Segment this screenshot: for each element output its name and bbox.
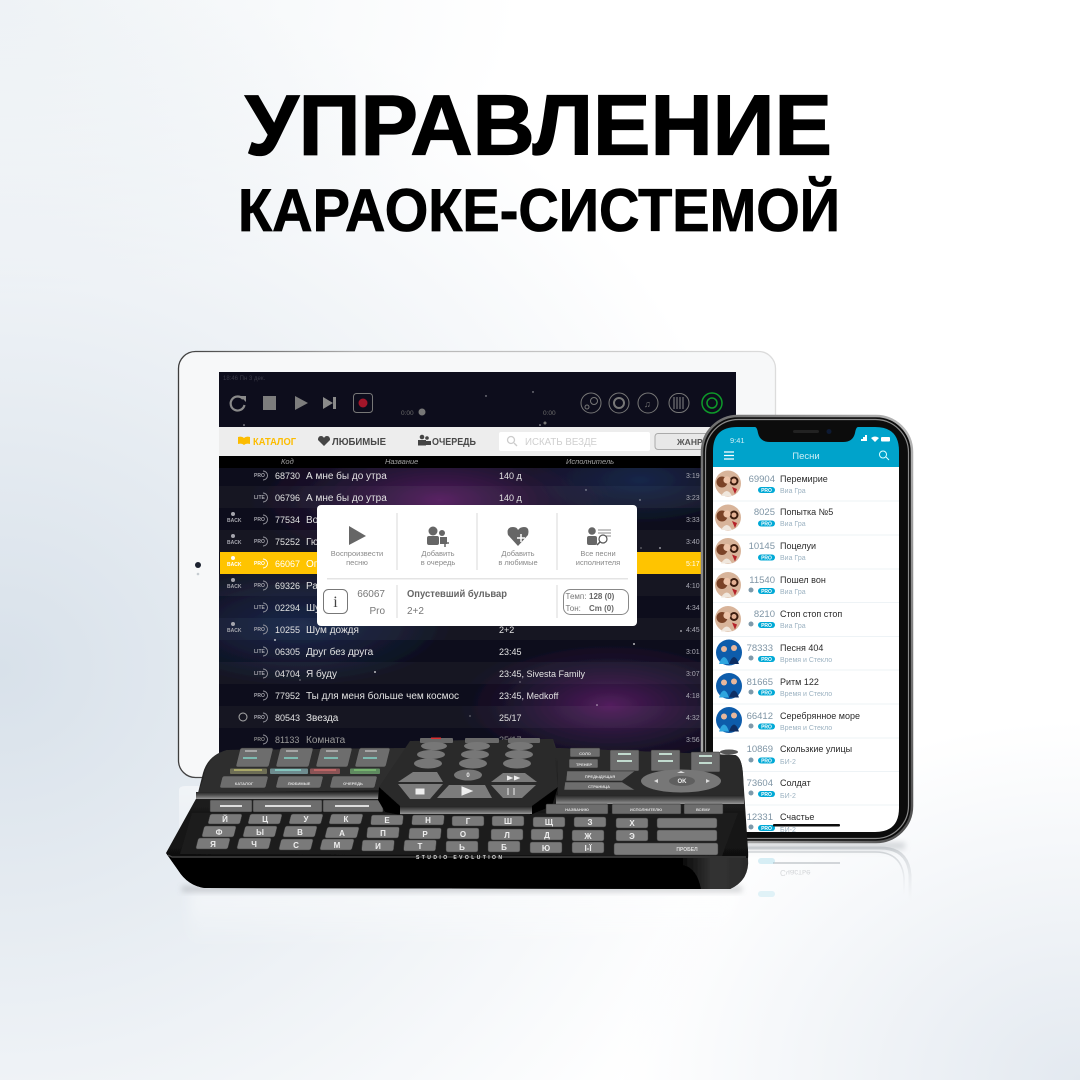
phone song list: Виа Гра (780, 488, 806, 495)
song rows: 4:45 (686, 627, 700, 634)
song rows: 68730 (275, 471, 300, 481)
phone shadow and reflection (745, 843, 910, 900)
phone song list: Время и Стекло (780, 725, 832, 732)
tempo box: Cm (0) (589, 604, 614, 613)
song rows: 4:10 (686, 583, 700, 590)
phone song list: PRO (761, 488, 772, 494)
menu strip: ЖАНР (676, 437, 703, 447)
song rows: PRO (254, 561, 265, 567)
action labels: песню (346, 558, 368, 567)
cyrillic keyboard (196, 814, 718, 855)
cyrillic keyboard: Н (425, 816, 431, 825)
app header (713, 427, 899, 467)
song rows: 75252 (275, 537, 300, 547)
song rows: 77952 (275, 691, 300, 701)
highlighted row (220, 552, 736, 574)
song rows: А мне бы до утра (306, 492, 387, 504)
phone song list: Время и Стекло (780, 657, 832, 664)
pro badges (758, 487, 775, 831)
song rows: PRO (254, 627, 265, 633)
table header (219, 456, 736, 468)
phone song list: 10869 (747, 744, 773, 755)
icon: add to queue (427, 526, 449, 547)
icon: artist songs (587, 527, 611, 545)
cyrillic keyboard: А (339, 829, 345, 838)
table header: Исполнитель (566, 457, 614, 466)
song rows: 23:45, Medkoff (499, 691, 559, 701)
cyrillic keyboard: Щ (545, 818, 554, 827)
phone song list: PRO (761, 657, 772, 663)
song rows: BACK (227, 628, 242, 634)
right panel keys: ИСПОЛНИТЕЛЮ (630, 807, 662, 812)
song rows: BACK (227, 540, 242, 546)
phone song list: 8025 (754, 507, 775, 518)
remote reflection (190, 892, 740, 945)
cyrillic keyboard: Ф (216, 828, 223, 837)
phone song list: PRO (761, 623, 772, 629)
phone song list: Скользкие улицы (780, 744, 852, 754)
song rows: 25/17 (499, 713, 522, 723)
song rows: PRO (254, 715, 265, 721)
remote right panel (558, 748, 744, 796)
cyrillic keyboard: М (334, 841, 341, 850)
song details: Опустевший бульвар (407, 588, 507, 600)
phone song list: Стоп стоп стоп (780, 609, 842, 619)
phone (702, 416, 912, 842)
right panel keys: OK (678, 779, 687, 785)
song rows: Шум дождя (306, 625, 359, 636)
song rows: 5:17 (686, 561, 700, 568)
row separators (713, 501, 899, 805)
cyrillic keyboard: Ш (504, 817, 512, 826)
phone song list: БИ-2 (780, 759, 796, 766)
cyrillic keyboard: Ь (459, 843, 465, 852)
popup dialog (317, 505, 637, 626)
song rows: 3:40 (686, 539, 700, 546)
song rows: 2+2 (499, 625, 514, 635)
phone song list: 81665 (747, 677, 773, 688)
cyrillic keyboard: Л (504, 831, 510, 840)
remote keyboard plate (180, 813, 738, 856)
right panel keys: СОЛО (579, 751, 591, 756)
info icon: i (333, 594, 338, 611)
right panel keys (546, 748, 723, 814)
title (238, 78, 840, 244)
phone song list: БИ-2 (780, 827, 796, 834)
remote front face (166, 853, 747, 889)
song rows: PRO (254, 583, 265, 589)
action labels (331, 549, 620, 567)
phone camera (793, 429, 832, 434)
icon: play (349, 526, 366, 545)
table header: Название (385, 457, 418, 466)
action labels: Все песни (580, 549, 616, 558)
cyrillic keyboard: Ю (542, 844, 550, 853)
cyrillic keyboard: Ч (251, 840, 257, 849)
tablet body (178, 352, 776, 778)
remote right corner (683, 858, 748, 889)
menu strip: КАТАЛОГ (253, 437, 296, 448)
info icon (324, 590, 348, 614)
center keypad pod: 0 (466, 773, 470, 779)
phone song list: PRO (761, 556, 772, 562)
song details: 66067 (357, 589, 385, 600)
phone song list: PRO (761, 522, 772, 528)
icon: add to favourites (508, 527, 528, 546)
tablet screen (219, 372, 736, 754)
reflections under devices (179, 786, 910, 945)
cyrillic keyboard: Е (384, 816, 390, 825)
remote left panel (198, 748, 410, 793)
cyrillic keyboard: І-Ї (584, 844, 592, 853)
phone song list: 11540 (749, 575, 775, 586)
song rows: 3:23 (686, 495, 700, 502)
tempo box (564, 590, 628, 614)
table header: Код (281, 457, 294, 466)
song rows: Друг без друга (306, 646, 374, 658)
song rows (227, 470, 700, 746)
cyrillic keyboard: Ц (262, 815, 268, 824)
cyrillic keyboard: Э (629, 832, 635, 841)
phone song list: 12331 (747, 812, 773, 823)
remote control (166, 738, 748, 889)
song rows: Комната (306, 735, 346, 746)
action labels: в любимые (498, 558, 538, 567)
menu strip (219, 427, 736, 456)
song rows: 06305 (275, 647, 300, 657)
remote brand: STUDIO EVOLUTION (416, 855, 502, 861)
cyrillic keyboard: В (297, 828, 303, 837)
cyrillic keyboard: Д (544, 831, 550, 840)
phone song list: Счастье (780, 812, 814, 822)
song details: 2+2 (407, 606, 424, 617)
action labels: Воспроизвести (331, 549, 383, 558)
pod side wedges (378, 787, 558, 815)
song rows: 25/17 (499, 735, 522, 745)
phone song list: 73604 (747, 778, 773, 789)
song rows: LITE (254, 605, 265, 611)
phone body (702, 416, 912, 842)
song rows: 3:56 (686, 737, 700, 744)
remote floor shadow (182, 886, 742, 892)
cyrillic keyboard: З (587, 818, 593, 827)
tablet reflection (179, 786, 200, 880)
song rows: 3:33 (686, 517, 700, 524)
cyrillic keyboard: С (293, 841, 299, 850)
phone song list: Пошел вон (780, 575, 826, 585)
phone song list: PRO (761, 724, 772, 730)
pod lower strip (400, 806, 532, 814)
song rows: PRO (254, 693, 265, 699)
phone song list: 8210 (754, 609, 775, 620)
cyrillic keyboard: О (460, 830, 466, 839)
main illustration canvas (166, 94, 914, 904)
cyrillic keyboard: Т (418, 842, 423, 851)
phone song list: Виа Гра (780, 589, 806, 596)
song rows: Оп (306, 559, 319, 570)
cyrillic keyboard: ПРОБЕЛ (676, 847, 698, 853)
tablet home camera (195, 562, 201, 575)
home indicator (773, 824, 840, 826)
song rows: Шу (306, 603, 320, 614)
glossy strips (196, 792, 744, 804)
remote edge highlight (168, 855, 746, 857)
song rows: Ты для меня больше чем космос (306, 690, 459, 702)
title: УПРАВЛЕНИЕ (245, 78, 832, 174)
left panel keys: КАТАЛОГ (235, 781, 254, 786)
phone song list: 66412 (747, 711, 773, 722)
phone song list: PRO (761, 826, 772, 832)
left panel keys: ЛЮБИМЫЕ (288, 781, 311, 786)
song rows: LITE (254, 649, 265, 655)
song rows: BACK (227, 562, 242, 568)
app header: Песни (792, 451, 820, 462)
right panel keys: СТРАНИЦА (588, 784, 610, 789)
phone song list: Ритм 122 (780, 677, 819, 687)
phone song list: PRO (761, 589, 772, 595)
song rows: PRO (254, 517, 265, 523)
song rows: LITE (254, 671, 265, 677)
cyrillic keyboard: У (304, 815, 310, 824)
song rows: Ра (306, 581, 318, 592)
cyrillic keyboard: И (375, 842, 381, 851)
phone song list: 10145 (749, 541, 775, 552)
back marks (231, 512, 235, 626)
phone song list: Песня 404 (780, 643, 823, 653)
song rows: 77534 (275, 515, 300, 525)
cyrillic keyboard: Ж (583, 832, 592, 841)
phone song list (747, 474, 860, 834)
phone shadow and reflection: Счастье (780, 868, 811, 877)
format badge arcs (263, 471, 268, 744)
song rows: 4:32 (686, 715, 700, 722)
song rows: BACK (227, 584, 242, 590)
right panel keys: ТРЕНЕР (576, 762, 592, 767)
song rows: 4:18 (686, 693, 700, 700)
song rows: 10255 (275, 625, 300, 635)
cyrillic keyboard: К (344, 815, 349, 824)
phone song list: PRO (761, 690, 772, 696)
song rows: PRO (254, 737, 265, 743)
song rows: LITE (254, 495, 265, 501)
song rows: 06796 (275, 493, 300, 503)
song rows: 66067 (275, 559, 300, 569)
phone song list: PRO (761, 758, 772, 764)
song rows: 23:45, Sivesta Family (499, 669, 586, 679)
song rows: 3:07 (686, 671, 700, 678)
phone song list: 69904 (749, 474, 775, 485)
menu strip: ОЧЕРЕДЬ (432, 437, 476, 448)
menu strip: ИСКАТЬ ВЕЗДЕ (525, 437, 597, 448)
phone song list: PRO (761, 792, 772, 798)
phone song list: 78333 (747, 643, 773, 654)
action labels: исполнителя (576, 558, 620, 567)
phone song list: Виа Гра (780, 521, 806, 528)
left panel keys: ОЧЕРЕДЬ (343, 781, 363, 786)
phone song list: Солдат (780, 778, 811, 788)
song rows: 4:34 (686, 605, 700, 612)
phone song list: БИ-2 (780, 793, 796, 800)
top control bar: ♫ (644, 399, 651, 409)
cyrillic keyboard: Й (222, 815, 228, 824)
song rows: Гю (306, 537, 319, 548)
song rows: Во (306, 515, 319, 526)
song rows: 140 д (499, 471, 523, 481)
center keypad pod (378, 738, 558, 815)
tempo box: Темп: (566, 592, 586, 601)
phone song list: Поцелуи (780, 541, 816, 551)
status bar: 18:46 Пн 3 дек. (223, 376, 265, 382)
menu strip: ЛЮБИМЫЕ (332, 437, 386, 448)
cyrillic keyboard: Я (210, 840, 216, 849)
song rows: 3:01 (686, 649, 700, 656)
top control bar (231, 393, 722, 424)
phone song list: Виа Гра (780, 623, 806, 630)
top control bar: 0:00 (401, 410, 414, 417)
stars (243, 391, 682, 717)
right panel keys: ВСЕМУ (696, 807, 711, 812)
cyrillic keyboard: Г (466, 817, 471, 826)
cyrillic keyboard: Р (422, 830, 428, 839)
phone song list: Время и Стекло (780, 691, 832, 698)
song rows: Звезда (306, 713, 339, 724)
song rows: А мне бы до утра (306, 470, 387, 482)
phone screen (713, 427, 899, 834)
song rows: 81133 (275, 735, 299, 745)
tempo box: 128 (0) (589, 592, 615, 601)
phone song list: Перемирие (780, 474, 828, 484)
title: КАРАОКЕ-СИСТЕМОЙ (238, 177, 840, 244)
row stripes (219, 486, 736, 728)
song rows: PRO (254, 539, 265, 545)
singer marks (748, 588, 754, 830)
app header: 9:41 (730, 436, 745, 445)
top control bar: 0:00 (543, 410, 556, 417)
phone song list: Попытка №5 (780, 507, 833, 517)
cyrillic keyboard: П (380, 829, 386, 838)
song details: Pro (369, 606, 385, 617)
song rows: 02294 (275, 603, 300, 613)
cyrillic keyboard: Б (501, 843, 507, 852)
artist avatars (715, 470, 742, 754)
left panel keys (210, 748, 390, 812)
song rows: 69326 (275, 581, 300, 591)
tempo box: Тон: (566, 604, 581, 613)
remote body (166, 739, 748, 889)
phone song list: Виа Гра (780, 555, 806, 562)
song details (357, 588, 507, 617)
right panel keys: ПРЕДЫДУЩАЯ (585, 774, 615, 779)
phone song list: Серебрянное море (780, 711, 860, 721)
action labels: Добавить (501, 549, 535, 558)
song rows: PRO (254, 473, 265, 479)
song rows: Я буду (306, 668, 337, 680)
song rows: 140 д (499, 493, 523, 503)
action labels: в очередь (421, 558, 455, 567)
cyrillic keyboard: Х (629, 819, 635, 828)
action labels: Добавить (421, 549, 455, 558)
song rows: 04704 (275, 669, 300, 679)
song rows: 3:19 (686, 473, 700, 480)
song rows: 80543 (275, 713, 300, 723)
song rows: BACK (227, 518, 242, 524)
right panel keys: НАЗВАНИЮ (565, 807, 589, 812)
song rows: 23:45 (499, 647, 522, 657)
cyrillic keyboard: Ы (256, 828, 264, 837)
tablet (150, 352, 776, 778)
